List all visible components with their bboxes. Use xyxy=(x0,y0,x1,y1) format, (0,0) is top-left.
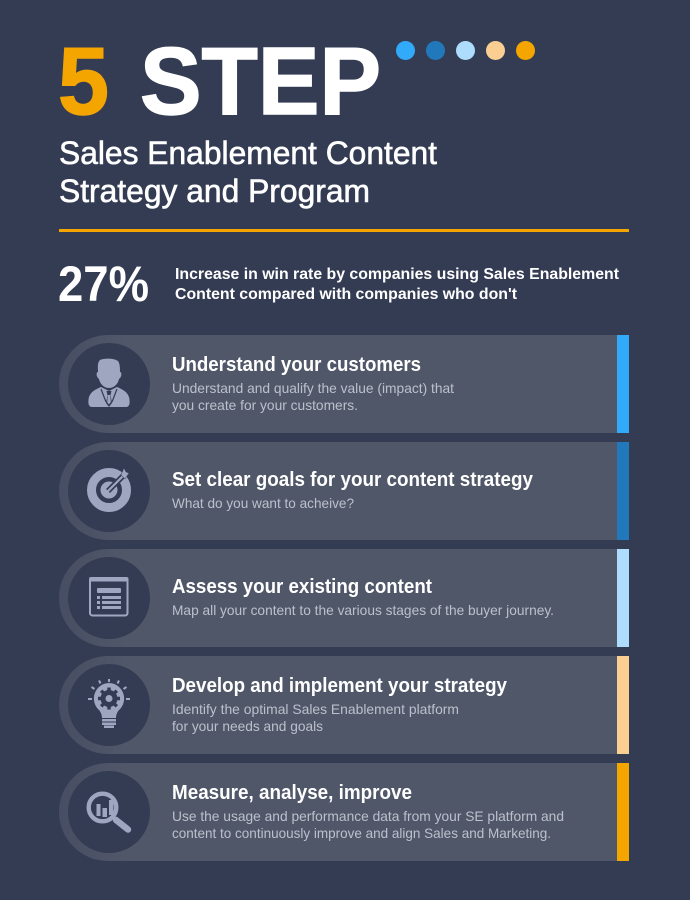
subtitle: Sales Enablement Content xyxy=(59,135,437,171)
subtitle: Strategy and Program xyxy=(59,173,370,209)
description: Understand and qualify the value (impact) that xyxy=(172,380,454,396)
statistic description: Increase in win rate by companies using Sales Enablement xyxy=(175,266,620,283)
icon: light bulb with gear xyxy=(88,679,130,728)
icon: magnifier with bars xyxy=(89,794,128,830)
heading: Develop and implement your strategy xyxy=(172,675,508,697)
description: Identify the optimal Sales Enablement platform xyxy=(172,701,459,717)
description: for your needs and goals xyxy=(172,718,323,734)
description: Use the usage and performance data from your SE platform and xyxy=(172,808,564,824)
description: content to continuously improve and align Sales and Marketing. xyxy=(172,825,551,841)
panel: step 4 xyxy=(59,656,629,754)
colour dots xyxy=(396,41,535,60)
heading: Assess your existing content xyxy=(172,576,432,598)
title: 5 STEP: STEP xyxy=(140,28,381,135)
icon: content document xyxy=(89,577,128,616)
icon: businessman xyxy=(88,359,130,407)
description xyxy=(172,380,454,413)
heading: Set clear goals for your content strategy xyxy=(172,469,534,491)
statistic: 27%: 27% xyxy=(58,256,149,312)
description xyxy=(172,701,459,734)
subtitle xyxy=(59,135,437,209)
statistic description: Content compared with companies who don't xyxy=(175,286,518,303)
panel: step 2 xyxy=(59,442,629,540)
description: Map all your content to the various stages of the buyer journey. xyxy=(172,602,554,618)
description: What do you want to acheive? xyxy=(172,495,354,511)
heading: Measure, analyse, improve xyxy=(172,782,412,804)
divider xyxy=(59,229,629,232)
description: you create for your customers. xyxy=(172,397,358,413)
title: 5 STEP: 5 xyxy=(58,28,109,135)
panel: step 5 xyxy=(59,763,629,861)
description xyxy=(172,808,564,841)
panel: step 1 xyxy=(59,335,629,433)
icon: target with arrow xyxy=(92,468,129,508)
statistic description xyxy=(175,266,620,303)
panel: step 3 xyxy=(59,549,629,647)
heading: Understand your customers xyxy=(172,354,421,376)
